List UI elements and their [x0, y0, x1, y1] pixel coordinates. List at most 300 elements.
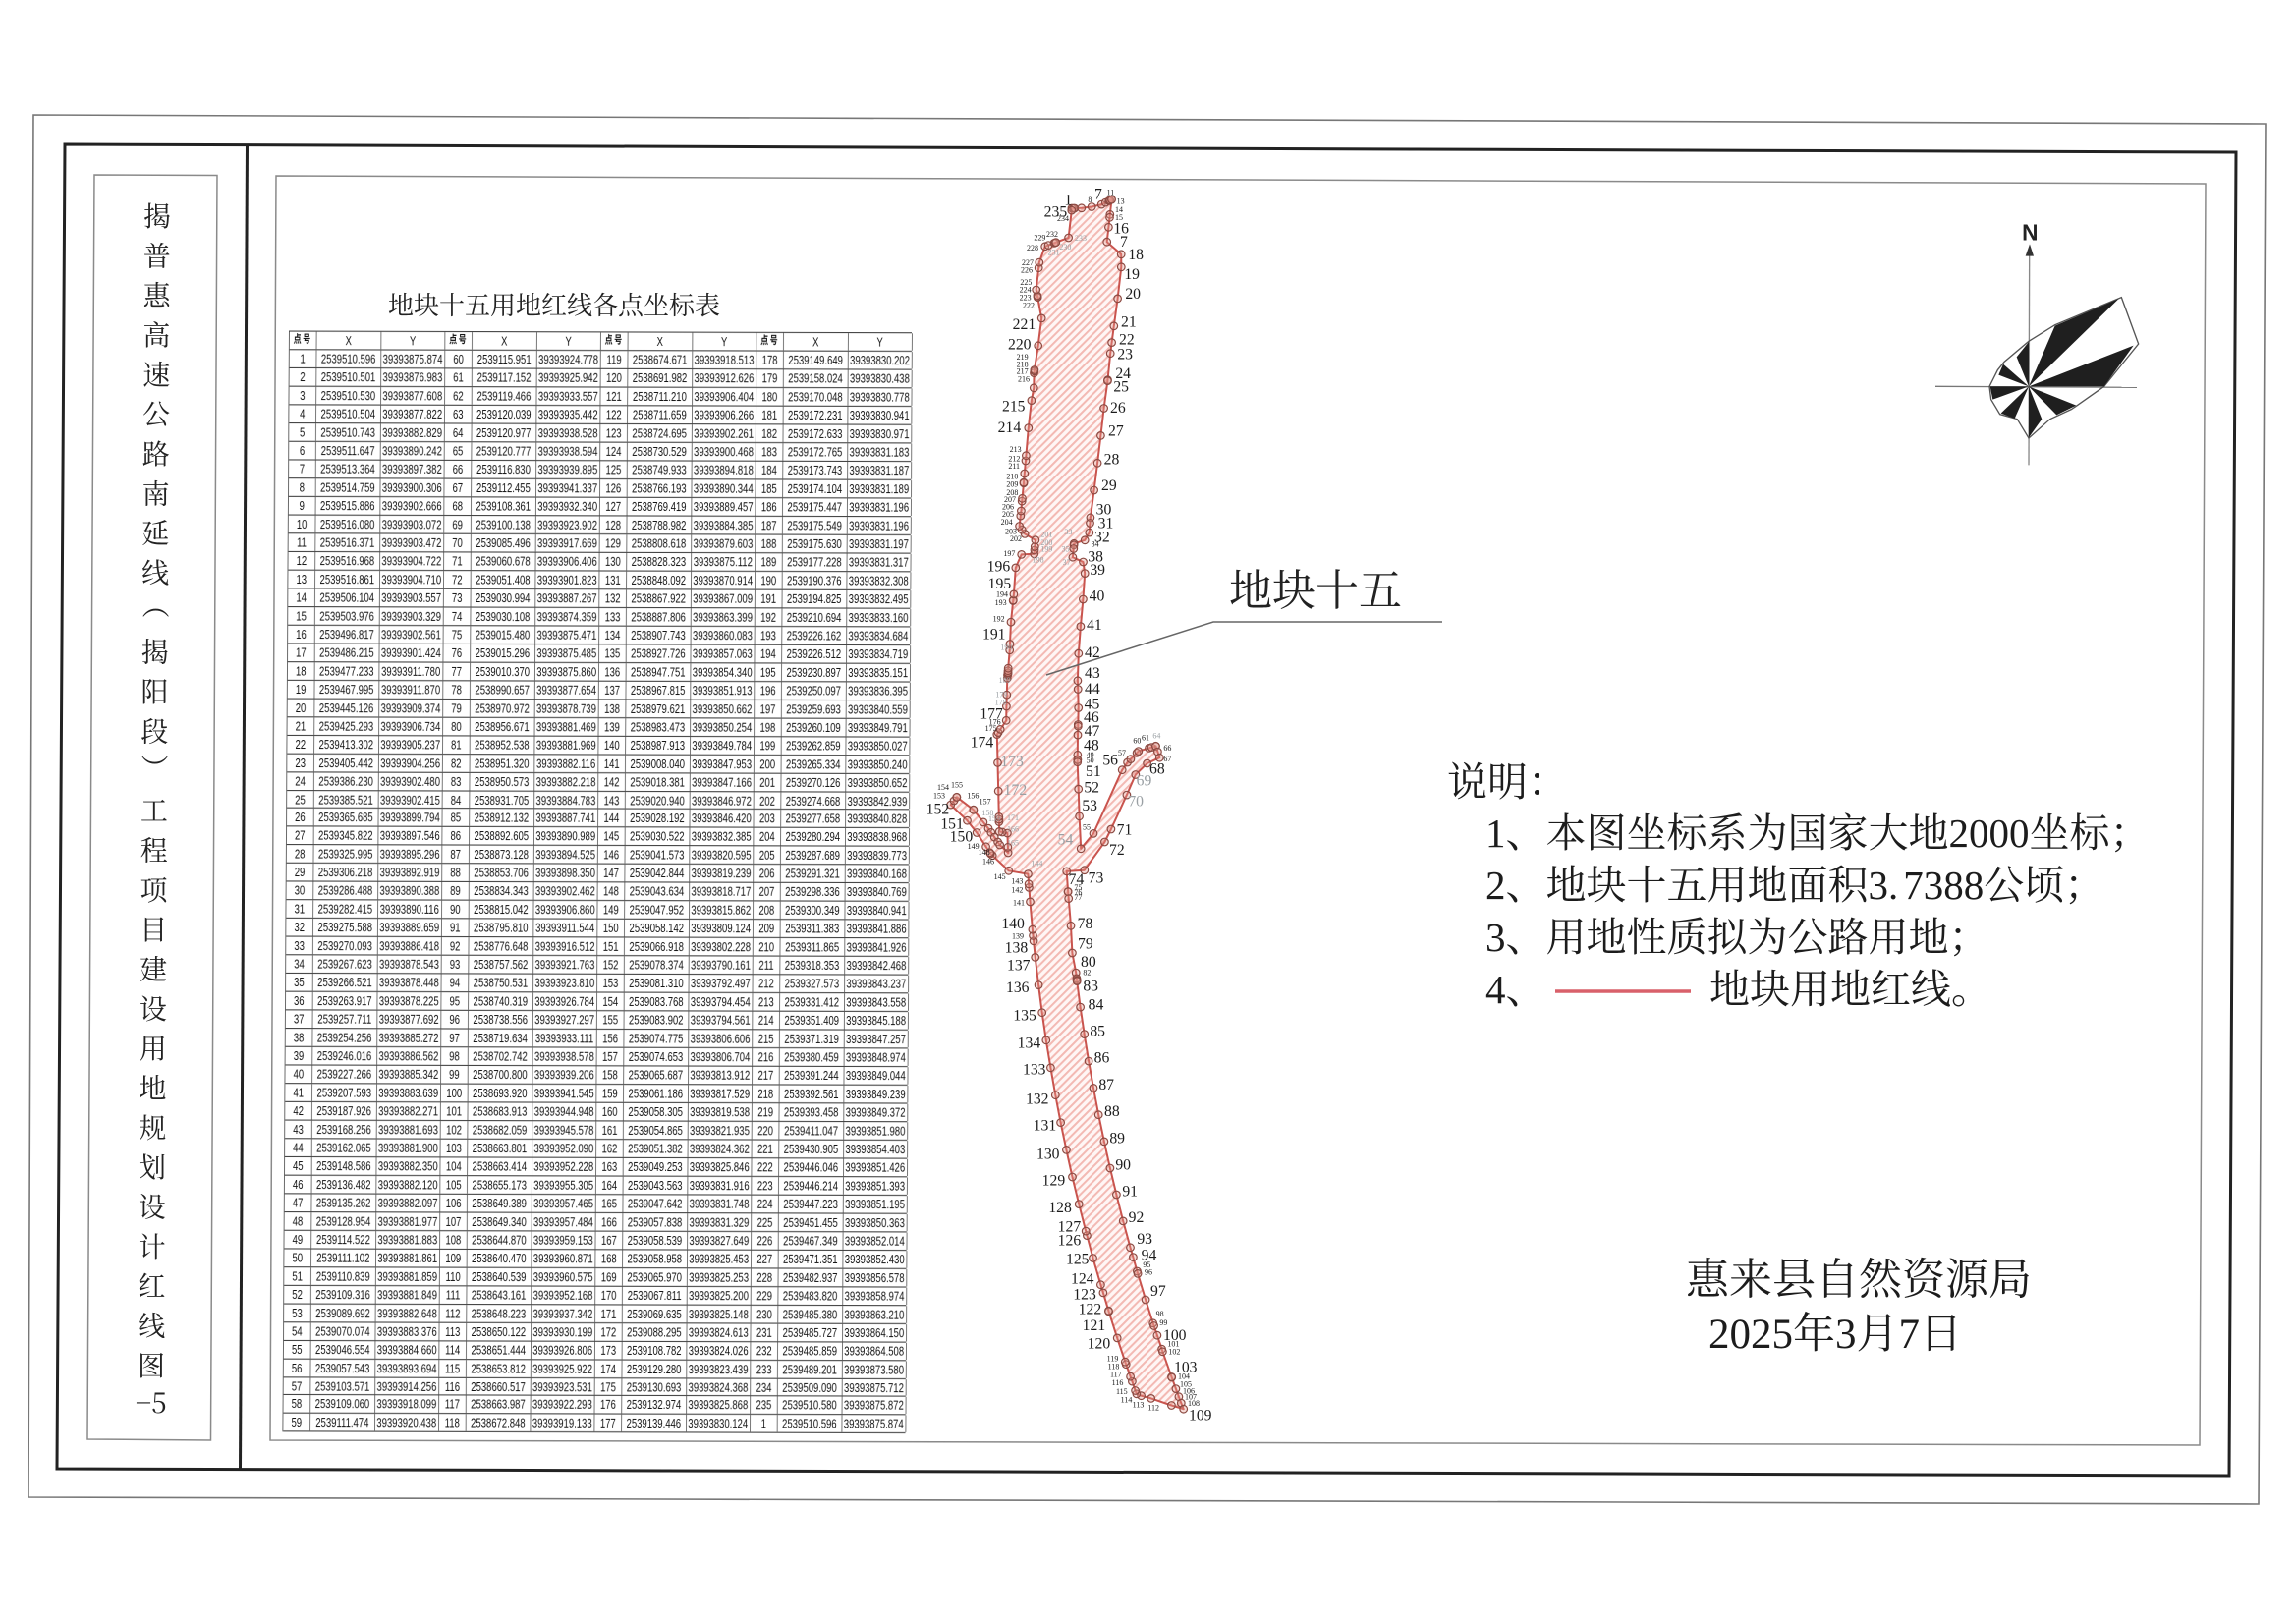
- point labels: middle section: 57: [1118, 749, 1126, 757]
- coordinate table: 2539043.563: [628, 1178, 683, 1193]
- point labels: north section: 16: [1113, 220, 1129, 237]
- vertical project title: 用: [140, 1028, 167, 1067]
- coordinate table: 39393850.254: [692, 719, 752, 735]
- coordinate table: 2539058.305: [628, 1104, 683, 1119]
- coordinate table: 2539511.647: [321, 443, 375, 459]
- coordinate table: 2539291.321: [785, 867, 840, 881]
- point labels: southern tip: 96: [1145, 1268, 1152, 1277]
- coordinate table: 39393932.340: [537, 499, 597, 514]
- coordinate table: 2539129.280: [627, 1361, 682, 1376]
- coordinate table: 2539108.361: [476, 499, 531, 514]
- coordinate table: 158: [602, 1068, 618, 1083]
- coordinate table: 39393792.497: [691, 976, 751, 991]
- coordinate table: 2539085.496: [476, 535, 531, 550]
- coordinate table: 2539057.543: [315, 1360, 370, 1375]
- point labels: middle section: [926, 588, 1171, 908]
- coordinate table: 39393860.083: [693, 628, 753, 643]
- point labels: middle section: 193: [995, 598, 1007, 607]
- coordinate table: 74: [452, 608, 462, 624]
- coordinate table: 2539010.370: [475, 664, 530, 679]
- coordinate table: 137: [604, 683, 620, 698]
- coordinate table: 168: [601, 1251, 617, 1266]
- point labels: southern tip: 98: [1156, 1310, 1164, 1318]
- coordinate table: 39393875.485: [536, 645, 596, 661]
- point labels: southern tip: 95: [1143, 1260, 1150, 1269]
- vertical project title: 设: [140, 988, 167, 1028]
- point labels: southern tip: 118: [1108, 1362, 1119, 1371]
- coordinate table: 105: [446, 1177, 462, 1193]
- note 4: 4、: [1485, 967, 1546, 1012]
- coordinate table: 39393912.626: [694, 370, 754, 386]
- point labels: middle section: 179: [995, 690, 1007, 699]
- coordinate table: 2539327.573: [785, 977, 839, 991]
- coordinate table: 37: [294, 1012, 305, 1027]
- point labels: north section: 235: [1044, 204, 1067, 221]
- point labels: southern tip: 116: [1112, 1378, 1123, 1387]
- coordinate table: 39393890.344: [694, 480, 754, 496]
- point labels: north section: 197: [1003, 549, 1015, 558]
- coordinate table: 39393906.266: [694, 408, 754, 422]
- coordinate table: 39393889.659: [379, 921, 439, 935]
- coordinate table: 2539365.685: [318, 810, 373, 825]
- coordinate table: 211: [758, 958, 774, 973]
- point labels: southern tip: 125: [1066, 1252, 1090, 1268]
- coordinate table: 1: [300, 352, 306, 366]
- coordinate table: 151: [603, 939, 619, 954]
- coordinate table: 39393851.980: [846, 1123, 905, 1139]
- coordinate table: 39393858.974: [845, 1288, 904, 1304]
- coordinate table: 39393831.916: [690, 1178, 750, 1193]
- point labels: southern tip: 106: [1183, 1387, 1195, 1396]
- point labels: north section: 14: [1115, 205, 1123, 214]
- coordinate table: 123: [606, 425, 622, 441]
- coordinate table: 2538956.671: [475, 719, 530, 734]
- coordinate table: 2539170.048: [788, 389, 843, 405]
- table title: 地块十五用地红线各点坐标表: [388, 286, 720, 322]
- coordinate table: 148: [603, 884, 619, 899]
- notes heading: 说明：: [1447, 759, 1568, 805]
- coordinate table: 2538711.210: [633, 389, 687, 404]
- coordinate table: 39393841.886: [847, 922, 907, 936]
- coordinate table: 2538848.092: [632, 573, 686, 588]
- coordinate table: 2539158.024: [788, 371, 843, 386]
- coordinate table: 39393955.305: [533, 1177, 593, 1193]
- coordinate table: 2539430.905: [784, 1142, 838, 1156]
- coordinate table: 2539190.376: [787, 573, 842, 588]
- coordinate table: 2539516.371: [320, 534, 374, 550]
- note 4 legend text: 地块用地红线。: [1709, 967, 1991, 1012]
- coordinate table: 39393825.846: [690, 1159, 750, 1175]
- coordinate table: 2539380.459: [784, 1049, 839, 1065]
- point labels: middle section: 152: [926, 801, 949, 817]
- point labels: middle section: 166: [1007, 825, 1019, 834]
- coordinate table: 189: [760, 554, 776, 570]
- coordinate table: 2539030.994: [476, 590, 531, 605]
- vertical project title: 地: [139, 1067, 166, 1106]
- coordinate table: 2538979.621: [631, 700, 685, 716]
- coordinate table: 39393904.710: [381, 572, 441, 587]
- coordinate table: 2539413.302: [319, 737, 373, 752]
- point labels: north section: 26: [1110, 400, 1126, 417]
- coordinate table: 109: [445, 1251, 461, 1265]
- coordinate table: 193: [760, 628, 776, 643]
- coordinate table: 88: [450, 866, 461, 880]
- coordinate table: 102: [446, 1122, 462, 1138]
- point labels: middle section: 141: [1013, 899, 1025, 908]
- coordinate table: 147: [603, 866, 619, 881]
- point labels: north section: 29: [1101, 477, 1117, 494]
- coordinate table: 39393849.372: [846, 1104, 906, 1120]
- coordinate table: 70: [452, 535, 463, 550]
- coordinate table: 39393838.968: [847, 830, 907, 845]
- coordinate table: 39393854.340: [693, 664, 753, 680]
- coordinate table: 55: [292, 1342, 303, 1357]
- coordinate table: 39393809.124: [691, 921, 751, 936]
- coordinate table: 39393849.044: [846, 1068, 906, 1084]
- coordinate table: 93: [450, 957, 460, 973]
- coordinate table: 39393923.531: [532, 1379, 592, 1394]
- coordinate table: 2539510.580: [782, 1398, 837, 1414]
- coordinate table: 139: [604, 719, 620, 734]
- coordinate table: 2539081.310: [629, 976, 684, 991]
- point labels: south section: 135: [1013, 1007, 1036, 1024]
- coordinate table: 39393875.874: [844, 1417, 904, 1431]
- coordinate table: 39393941.337: [537, 480, 597, 496]
- coordinate table: 2539311.383: [785, 922, 839, 936]
- coordinate table: 2538674.671: [633, 353, 687, 367]
- coordinate table: 39393833.160: [849, 610, 908, 625]
- coordinate table: 2539030.522: [630, 829, 685, 844]
- coordinate table: Y: [876, 334, 883, 350]
- coordinate table: 39393839.773: [847, 848, 907, 864]
- point labels: north section: 216: [1018, 374, 1030, 383]
- point labels: north section: 30: [1096, 501, 1111, 518]
- coordinate table: 127: [605, 499, 621, 514]
- coordinate table: 39393882.218: [536, 774, 596, 789]
- coordinate table: 39393850.027: [848, 738, 908, 754]
- point labels: south section: 90: [1115, 1157, 1131, 1174]
- coordinate table: 2538693.920: [473, 1086, 528, 1100]
- point labels: south section: 131: [1034, 1118, 1056, 1135]
- coordinate table: 2539445.126: [319, 700, 373, 715]
- coordinate table: 2539345.822: [318, 828, 373, 844]
- coordinate table: 39393877.822: [382, 407, 442, 422]
- coordinate table: 2539046.554: [315, 1342, 370, 1357]
- coordinate table: 2539477.233: [319, 663, 374, 679]
- coordinate table: 157: [602, 1049, 618, 1064]
- coordinate table: 39393851.913: [693, 683, 753, 698]
- coordinate table: 2539119.466: [476, 389, 531, 404]
- coordinate table: 2539047.952: [630, 903, 684, 918]
- coordinate table: 2539298.336: [785, 884, 840, 900]
- coordinate table: 111: [446, 1287, 460, 1303]
- coordinate table: 18: [296, 663, 307, 678]
- point labels: north section: 7: [1120, 234, 1128, 251]
- coordinate table: 164: [601, 1178, 617, 1193]
- coordinate table: 2538912.132: [475, 811, 529, 825]
- coordinate table: 2539065.687: [629, 1068, 683, 1083]
- coordinate table: 39393901.424: [381, 645, 441, 660]
- coordinate table: 2538649.389: [472, 1196, 527, 1210]
- coordinate table: 125: [605, 463, 621, 477]
- coordinate table: 66: [453, 462, 463, 477]
- coordinate table: 179: [762, 371, 777, 386]
- coordinate table: 30: [295, 883, 305, 898]
- coordinate table: 155: [602, 1013, 618, 1028]
- coordinate table: 39393831.196: [849, 518, 909, 533]
- coordinate table: 2539054.865: [628, 1123, 683, 1138]
- coordinate table: 39393918.513: [695, 353, 754, 367]
- coordinate table: 2538776.648: [474, 938, 528, 954]
- point labels: south section: 85: [1090, 1023, 1105, 1039]
- coordinate table: 39393886.562: [378, 1048, 438, 1064]
- coordinate table: 64: [453, 425, 463, 440]
- coordinate table: 169: [601, 1269, 617, 1284]
- coordinate table: 131: [605, 573, 621, 588]
- coordinate table: 215: [758, 1032, 774, 1046]
- coordinate table: 39393881.861: [377, 1251, 437, 1265]
- coordinate table: 39393923.902: [537, 517, 597, 532]
- coordinate table: [282, 330, 912, 1434]
- point labels: southern tip: 124: [1071, 1271, 1094, 1288]
- coordinate table: 39393882.097: [378, 1196, 438, 1210]
- coordinate table: 2539513.364: [320, 462, 375, 476]
- coordinate table: 2539516.861: [320, 572, 374, 587]
- coordinate table: 39393870.914: [693, 573, 753, 588]
- coordinate table: 2539110.839: [316, 1268, 370, 1284]
- coordinate table: 2539446.046: [784, 1159, 838, 1175]
- coordinate table: 2539018.381: [630, 774, 685, 789]
- coordinate table: 2539510.743: [320, 424, 375, 440]
- coordinate table: 2539168.256: [316, 1122, 371, 1137]
- coordinate table: 2538650.122: [472, 1323, 526, 1339]
- point labels: middle section: 173: [1000, 754, 1024, 770]
- coordinate table: 2539270.093: [317, 938, 372, 954]
- coordinate table: 2538663.414: [473, 1158, 527, 1174]
- point labels: north section: 203: [1005, 527, 1017, 535]
- coordinate table: 156: [602, 1031, 618, 1046]
- coordinate table: 39393920.438: [376, 1416, 436, 1430]
- vertical project title: 规: [139, 1107, 166, 1147]
- point labels: middle section: 40: [1090, 588, 1104, 605]
- vertical project title: 计: [139, 1226, 166, 1265]
- point labels: north section: 232: [1046, 230, 1058, 239]
- point labels: middle section: 54: [1058, 831, 1073, 848]
- coordinate table: 39393917.669: [537, 535, 597, 551]
- coordinate table: 225: [757, 1214, 772, 1230]
- coordinate table: 39393877.654: [536, 682, 596, 698]
- coordinate table: 39393867.009: [693, 590, 753, 606]
- point labels: south section: 137: [1007, 957, 1031, 974]
- coordinate table: 2539280.294: [786, 829, 840, 845]
- coordinate table: 110: [446, 1268, 461, 1284]
- point labels: north section: 21: [1121, 314, 1137, 331]
- coordinate table: 67: [452, 480, 463, 495]
- coordinate table: 39393881.849: [377, 1287, 437, 1302]
- coordinate table: 2539066.918: [629, 939, 684, 954]
- coordinate table: 27: [295, 828, 306, 843]
- coordinate table: 2539262.859: [786, 738, 841, 754]
- coordinate table: 119: [606, 353, 622, 367]
- coordinate table: 39393892.919: [380, 866, 439, 880]
- coordinate table: 2538990.657: [475, 682, 530, 698]
- coordinate table: 2538834.343: [474, 884, 529, 899]
- coordinate table: 39393921.763: [535, 957, 594, 973]
- point labels: north section: 31: [1098, 515, 1113, 532]
- coordinate table: 2539049.253: [628, 1159, 683, 1174]
- coordinate table: 39393850.240: [848, 756, 908, 771]
- coordinate table: 39393831.187: [849, 463, 909, 478]
- point labels: north section: 33: [1064, 528, 1072, 536]
- notes block: [1447, 759, 2150, 1012]
- coordinate table: 153: [602, 976, 618, 991]
- coordinate table: 4: [300, 407, 305, 421]
- coordinate table: 39393906.734: [380, 718, 440, 734]
- coordinate table: 117: [445, 1397, 460, 1413]
- coordinate table: 2539100.138: [476, 517, 531, 532]
- coordinate table: 41: [293, 1085, 304, 1100]
- coordinate table: 2539318.353: [785, 958, 839, 974]
- coordinate table: 185: [761, 481, 777, 496]
- coordinate table: 39393840.941: [847, 903, 907, 919]
- coordinate table: 106: [446, 1196, 462, 1210]
- coordinate table: 2539177.228: [787, 554, 842, 570]
- coordinate table: 3: [300, 388, 306, 403]
- coordinate table: 39: [294, 1048, 304, 1063]
- coordinate table: 2539471.351: [783, 1252, 838, 1266]
- coordinate table: 97: [449, 1031, 460, 1045]
- coordinate table: 227: [756, 1252, 772, 1266]
- point labels: southern tip: 112: [1148, 1404, 1159, 1413]
- coordinate table: 2539135.262: [316, 1195, 370, 1210]
- coordinate table: 2539246.016: [317, 1048, 371, 1064]
- coordinate table: 65: [453, 443, 463, 459]
- vertical project title: 速: [142, 354, 170, 393]
- vertical project title: ）: [136, 755, 175, 782]
- point labels: north section: 39: [1090, 562, 1105, 579]
- coordinate table: 39393881.883: [377, 1232, 437, 1247]
- coordinate table: 2538907.743: [631, 628, 686, 643]
- coordinate table: 71: [452, 553, 463, 569]
- coordinate table: 2539393.458: [784, 1104, 839, 1120]
- coordinate table: 2539008.040: [630, 756, 685, 771]
- coordinate table: 39393927.297: [534, 1012, 594, 1028]
- coordinate table: 39393824.368: [689, 1379, 748, 1395]
- coordinate table: 202: [759, 793, 775, 808]
- coordinate table: 2539187.926: [316, 1103, 371, 1119]
- coordinate table: 2539391.244: [784, 1068, 839, 1084]
- coordinate table: 2539250.097: [786, 683, 841, 699]
- coordinate table: 39393902.462: [535, 884, 595, 899]
- coordinate table: 39393890.989: [535, 829, 595, 844]
- coordinate table: 199: [759, 738, 775, 753]
- coordinate table: 173: [600, 1342, 616, 1358]
- point labels: middle section: 174: [971, 735, 993, 752]
- coordinate table: 39393827.649: [689, 1233, 749, 1248]
- coordinate table: 63: [453, 407, 464, 422]
- coordinate table: 163: [601, 1159, 617, 1174]
- point labels: north section: 22: [1119, 332, 1135, 349]
- coordinate table: 39393952.228: [533, 1159, 593, 1174]
- coordinate table: 39393875.112: [694, 554, 753, 570]
- coordinate table: 78: [451, 682, 462, 698]
- coordinate table: 2539467.995: [319, 682, 374, 697]
- point labels: middle section: 71: [1117, 821, 1132, 838]
- vertical project title: 目: [140, 909, 167, 948]
- coordinate table: 39393933.111: [535, 1031, 593, 1046]
- coordinate table: 2538987.913: [631, 738, 685, 753]
- coordinate table: 39393832.308: [849, 573, 909, 588]
- coordinate table: 47: [293, 1195, 303, 1210]
- coordinate table: 2539074.775: [629, 1031, 683, 1046]
- coordinate table: 39393885.342: [378, 1067, 438, 1082]
- leader line to parcel label: [1046, 622, 1442, 675]
- coordinate table: 2538757.562: [474, 957, 528, 973]
- point labels: southern tip: 123: [1073, 1287, 1096, 1304]
- coordinate table: 94: [450, 976, 460, 990]
- coordinate table: 39393831.183: [850, 445, 909, 460]
- point labels: north section: 231: [1048, 248, 1060, 256]
- point labels: north section: 228: [1027, 244, 1038, 252]
- coordinate table: 50: [292, 1250, 303, 1265]
- coordinate table: 2539446.214: [783, 1178, 838, 1194]
- coordinate table: 166: [601, 1214, 617, 1229]
- boundary point markers: [947, 196, 1187, 1413]
- point labels: north section: 229: [1034, 233, 1045, 242]
- vertical project title: 延: [141, 513, 169, 552]
- icon: north arrow and wind rose: N: [2022, 220, 2039, 246]
- coordinate table: 99: [449, 1067, 460, 1083]
- point labels: middle section: 60: [1133, 737, 1141, 746]
- point labels: north section: 11: [1107, 188, 1114, 196]
- point labels: middle section: 76: [1074, 888, 1082, 897]
- coordinate table: 152: [603, 958, 619, 973]
- coordinate table: 39393878.448: [379, 976, 439, 990]
- coordinate table: 39393875.872: [844, 1398, 904, 1414]
- coordinate table: 203: [759, 812, 775, 826]
- coordinate table: 53: [292, 1305, 303, 1320]
- coordinate table: 194: [760, 646, 776, 661]
- coordinate table: 1: [761, 1417, 766, 1431]
- point labels: north section: 217: [1017, 367, 1029, 376]
- point labels: south section: 80: [1081, 954, 1096, 971]
- coordinate table: 188: [761, 536, 776, 551]
- coordinate table: 39393881.977: [377, 1213, 437, 1229]
- note 3: 3、用地性质拟为公路用地；: [1485, 915, 1988, 960]
- coordinate table: 39393852.430: [845, 1252, 905, 1266]
- point labels: middle section: 148: [979, 848, 990, 857]
- point labels: middle section: 55: [1083, 822, 1091, 831]
- vertical project title: 揭: [141, 632, 169, 671]
- coordinate table: 138: [604, 700, 620, 716]
- coordinate table: 2538853.706: [474, 866, 529, 880]
- panel: title column box: [87, 175, 217, 1440]
- coordinate table: 224: [757, 1197, 773, 1211]
- point labels: middle section: 44: [1085, 681, 1100, 698]
- coordinate table: 8: [300, 479, 305, 495]
- coordinate table: 39393825.253: [689, 1269, 749, 1285]
- point labels: north section: 204: [1001, 518, 1013, 527]
- point labels: middle section: 77: [1074, 893, 1082, 902]
- coordinate table: 2539074.653: [629, 1049, 683, 1064]
- point labels: north section: 198: [1033, 556, 1044, 565]
- coordinate table: 39393902.666: [382, 498, 442, 514]
- point labels: southern tip: 99: [1159, 1318, 1167, 1327]
- coordinate table: 39393884.783: [535, 792, 595, 808]
- point labels: north section: 212: [1008, 454, 1020, 463]
- coordinate table: 2539120.777: [476, 444, 531, 459]
- point labels: middle section: 176: [989, 718, 1001, 727]
